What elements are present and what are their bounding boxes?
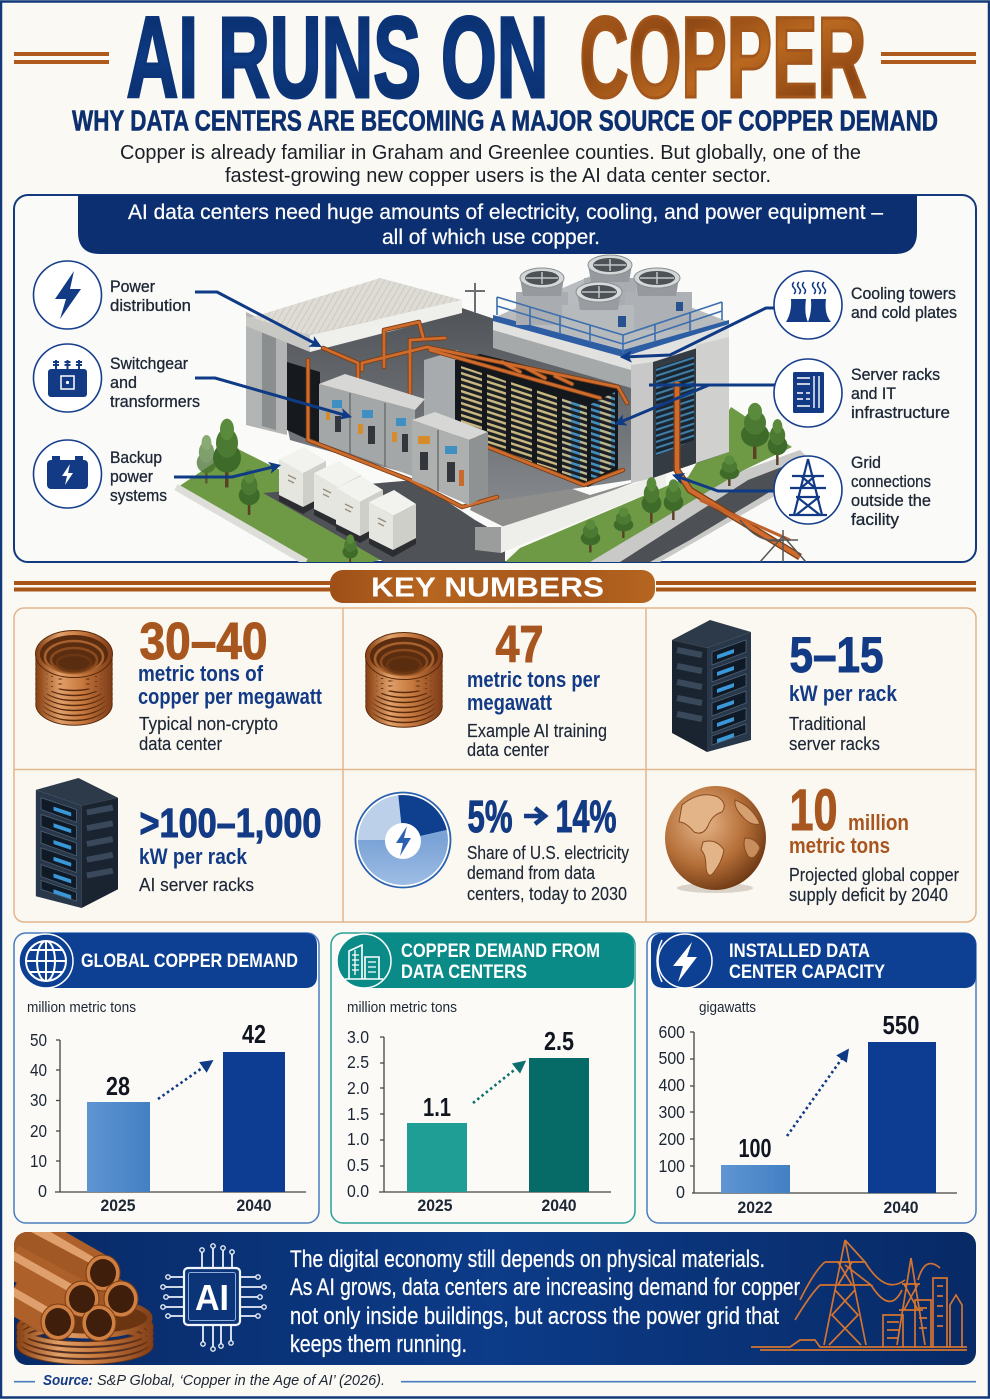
label: backup power systems (110, 449, 167, 505)
label: backup power systems: systems (110, 487, 167, 505)
bar chart: installed capacity (658, 1010, 957, 1217)
callout arrows (174, 292, 775, 491)
bar chart: global copper demand (30, 1019, 306, 1215)
panel: copper demand from data centers chart: million metric tons (347, 999, 457, 1016)
banner: copper use statement: AI data centers need huge amounts of electricity, cooling, and power equipment – (128, 200, 883, 224)
label: server racks and IT infrastructure: infrastructure (851, 404, 950, 422)
icon: transmission tower (774, 456, 842, 524)
intro text (120, 142, 861, 187)
stat: 10 million metric tons: 10 (790, 778, 838, 843)
stat: 5-15 kW per rack: server racks (789, 734, 880, 754)
label: backup power systems: power (110, 468, 153, 486)
label: grid connections (851, 454, 931, 529)
arrow: growth (473, 1067, 518, 1103)
illustration: data center cutaway (174, 255, 820, 565)
label: server racks and IT infrastructure (851, 366, 950, 422)
site ground (180, 449, 380, 562)
bar chart: data center demand: 2.5 (347, 1052, 369, 1072)
bar chart: global copper demand: 2025 (100, 1196, 136, 1215)
bar chart: installed capacity: 550 (882, 1010, 920, 1040)
stat: 10 million metric tons (665, 778, 959, 905)
label: switchgear and transformers: and (110, 374, 137, 392)
header: data center demand: DATA CENTERS (401, 961, 527, 983)
stat: 10 million metric tons: Projected global copper (789, 865, 959, 885)
bar chart: data center demand: 3.0 (347, 1027, 369, 1047)
copper piping (308, 322, 627, 507)
stat: 100-1000 kW per rack: >100–1,000 (140, 800, 322, 846)
bar chart: global copper demand: 42 (242, 1019, 266, 1049)
stat: 47 metric tons: Example AI training (467, 721, 607, 741)
label: backup power systems: Backup (110, 449, 162, 467)
icon: lightning (657, 934, 712, 988)
stat: 5 to 14 percent: 5% (468, 791, 512, 842)
trees (197, 403, 787, 565)
right room (653, 338, 729, 478)
switchgear cabinets (319, 374, 488, 505)
stat: 47 metric tons: metric tons per (467, 667, 600, 692)
stat: 47 metric tons (368, 616, 607, 760)
stat: 30-40 metric tons: metric tons of (138, 661, 264, 686)
bar chart: data center demand: 1.0 (347, 1129, 369, 1149)
label: power distribution: distribution (110, 297, 191, 315)
stat: 100-1000 kW per rack: AI server racks (139, 875, 254, 895)
grid feed pipes (677, 382, 806, 562)
icon: AI server rack (36, 778, 118, 908)
label: cooling towers and cold plates (851, 285, 957, 322)
bar chart: data center demand: 1.1 (423, 1092, 451, 1122)
header: data center demand (337, 933, 634, 988)
bar chart: global copper demand: 10 (30, 1151, 47, 1171)
bar chart: installed capacity: 2040 (884, 1198, 918, 1217)
icon: copper coil (368, 635, 440, 725)
deck railing (497, 297, 722, 353)
panel: conclusion banner (14, 1232, 976, 1365)
panel: installed data center capacity chart: gigawatts (699, 999, 756, 1016)
panel: installed data center capacity chart (647, 933, 976, 1223)
panel: copper demand from data centers chart (331, 933, 635, 1223)
bar chart: global copper demand: 50 (30, 1030, 47, 1050)
icon: globe (19, 934, 73, 988)
stat: 5 to 14 percent: 14% (556, 791, 616, 842)
header: global copper demand (19, 933, 317, 988)
label: power distribution (110, 278, 191, 315)
bar chart: installed capacity: 100 (658, 1156, 685, 1176)
bar chart: installed capacity: 600 (658, 1022, 685, 1042)
label: cooling towers and cold plates: Cooling towers (851, 285, 956, 303)
icon: AI chip: AI (195, 1277, 229, 1318)
text block: conclusion: keeps them running. (290, 1331, 467, 1358)
text block: conclusion: As AI grows, data centers are increasing demand for copper (290, 1274, 800, 1301)
label: grid connections: Grid (851, 454, 881, 472)
bar chart: installed capacity: 400 (658, 1075, 685, 1095)
stat: 5 to 14 percent: centers, today to 2030 (467, 884, 627, 904)
cooling towers (516, 254, 692, 330)
banner: copper use statement: all of which use copper. (382, 225, 600, 249)
banner: copper use statement (78, 195, 917, 254)
icon: cooling towers (774, 271, 842, 339)
stat: 5 to 14 percent: demand from data (467, 863, 596, 883)
bar chart: data center demand (347, 1026, 611, 1215)
stat: 30-40 metric tons: Typical non-crypto (139, 714, 278, 734)
header: installed capacity (651, 933, 976, 988)
stat: 30-40 metric tons: 30–40 (140, 613, 268, 671)
icon: copper globe (665, 786, 766, 893)
heading: key numbers: KEY NUMBERS (371, 572, 604, 602)
arrow: today to 2030 (524, 808, 545, 824)
stat: 47 metric tons: megawatt (467, 690, 553, 715)
stat: 100-1000 kW per rack: kW per rack (139, 844, 248, 869)
left wall (246, 312, 287, 435)
header: installed capacity: CENTER CAPACITY (729, 961, 885, 983)
source line: S&P Global, ‘Copper in the Age of AI’ (2026). (97, 1372, 385, 1389)
bar chart: global copper demand: 0 (38, 1181, 47, 1201)
panel: key numbers grid (14, 608, 976, 922)
stat: 5-15 kW per rack (672, 620, 898, 754)
stat: 5 to 14 percent (356, 791, 629, 904)
label: grid connections: outside the (851, 492, 931, 510)
interior back wall (270, 305, 631, 500)
server racks (455, 354, 618, 487)
bar chart: global copper demand: 40 (30, 1060, 47, 1080)
text block: conclusion: not only inside buildings, but across the power grid that (290, 1303, 779, 1330)
stat: 10 million metric tons: supply deficit by 2040 (789, 885, 948, 905)
bar chart: installed capacity: 0 (676, 1182, 685, 1202)
bar chart: data center demand: 0.0 (347, 1181, 369, 1201)
panel: data center diagram (14, 195, 976, 565)
bar chart: data center demand: 2040 (542, 1196, 576, 1215)
panel: global copper demand chart: million metric tons (27, 999, 136, 1016)
bar chart: data center demand: 1.5 (347, 1104, 369, 1124)
chart: electricity share pie (356, 792, 450, 888)
intro text: fastest-growing new copper users is the AI data center sector. (225, 165, 771, 187)
stat: 100-1000 kW per rack (36, 778, 322, 908)
stat: 10 million metric tons: metric tons (789, 833, 890, 858)
stat: 47 metric tons: data center (467, 740, 549, 760)
bar chart: installed capacity: 100 (738, 1133, 772, 1163)
header: data center demand: COPPER DEMAND FROM (401, 940, 600, 962)
stat: 30-40 metric tons (38, 613, 323, 754)
label: grid connections: connections (851, 473, 931, 491)
label: grid connections: facility (851, 511, 900, 529)
label: server racks and IT infrastructure: and IT (851, 385, 896, 403)
icon: power distribution (34, 261, 102, 329)
roof (250, 278, 462, 335)
icon: copper coil (38, 633, 110, 723)
panel: global copper demand chart (14, 933, 319, 1223)
bar chart: installed capacity: 500 (658, 1048, 685, 1068)
arrow: growth (158, 1066, 205, 1099)
heading: key numbers (14, 570, 976, 603)
label: switchgear and transformers: transformers (110, 393, 200, 411)
header: installed capacity: INSTALLED DATA (729, 940, 870, 962)
backup generators (279, 447, 416, 557)
header: global copper demand: GLOBAL COPPER DEMAND (81, 950, 298, 972)
bar chart: data center demand: 2025 (418, 1196, 452, 1215)
stat: 5-15 kW per rack: Traditional (789, 714, 866, 734)
bar chart: installed capacity: 300 (658, 1102, 685, 1122)
stat: 5-15 kW per rack: kW per rack (789, 681, 898, 706)
stat: 30-40 metric tons: copper per megawatt (138, 684, 323, 709)
arrow: growth (787, 1057, 843, 1136)
label: switchgear and transformers (110, 355, 200, 411)
icon: server rack (774, 359, 842, 427)
upper block with deck (493, 328, 631, 388)
source line (14, 1372, 976, 1389)
bar chart: global copper demand: 2040 (236, 1196, 272, 1215)
icon: switchgear and transformers (34, 344, 102, 412)
icon: AI chip (161, 1244, 266, 1351)
bar chart: data center demand: 2.5 (544, 1026, 574, 1056)
label: cooling towers and cold plates: and cold plates (851, 304, 957, 322)
label: switchgear and transformers: Switchgear (110, 355, 188, 373)
label: server racks and IT infrastructure: Server racks (851, 366, 940, 384)
bar chart: data center demand: 2.0 (347, 1078, 369, 1098)
text block: conclusion (290, 1246, 800, 1358)
text block: conclusion: The digital economy still depends on physical materials. (290, 1246, 765, 1273)
icon: buildings (337, 934, 391, 988)
bar chart: global copper demand: 28 (106, 1071, 130, 1101)
pole (465, 283, 485, 313)
bar chart: global copper demand: 20 (30, 1121, 47, 1141)
icon: server rack (672, 620, 751, 752)
bar chart: installed capacity: 2022 (738, 1198, 772, 1217)
icon: backup battery (34, 440, 102, 508)
stat: 47 metric tons: 47 (496, 616, 544, 674)
icon: power grid and skyline (751, 1240, 967, 1350)
stat: 10 million metric tons: million (848, 810, 909, 835)
label: power distribution: Power (110, 278, 155, 296)
stat: 5-15 kW per rack: 5–15 (790, 627, 884, 683)
icon: copper pipes and coil (14, 1232, 154, 1365)
bar chart: global copper demand: 30 (30, 1090, 47, 1110)
bar chart: installed capacity: 200 (658, 1129, 685, 1149)
source line: Source: (43, 1372, 93, 1389)
bar chart: data center demand: 0.5 (347, 1155, 369, 1175)
intro text: Copper is already familiar in Graham and Greenlee counties. But globally, one of the (120, 142, 861, 164)
stat: 30-40 metric tons: data center (139, 734, 222, 754)
stat: 5 to 14 percent: Share of U.S. electricity (467, 843, 629, 863)
